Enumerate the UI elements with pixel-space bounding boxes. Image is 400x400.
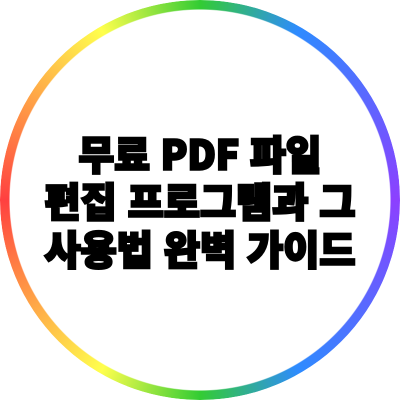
title: 사용법 완벽 가이드 (44, 218, 356, 276)
title: 편집 프로그램과 그 (44, 170, 356, 228)
title: 무료 PDF 파일 (78, 124, 322, 182)
